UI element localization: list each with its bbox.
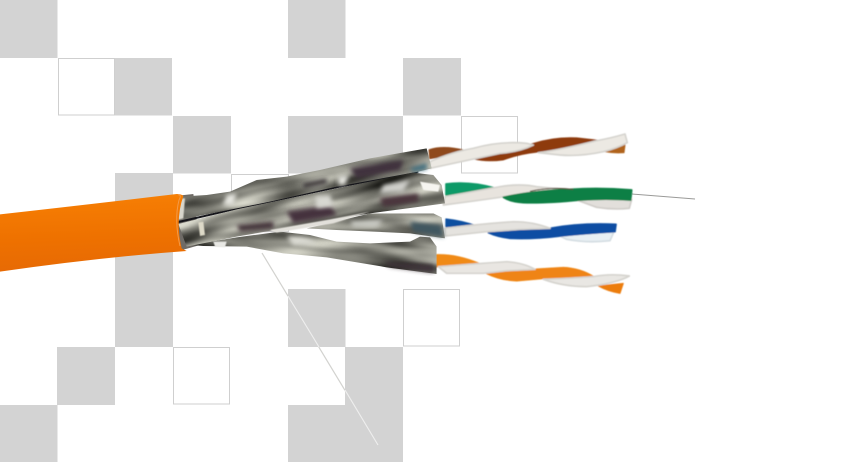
foil shield: top bundle	[183, 148, 432, 218]
wire pair: orange	[437, 255, 629, 293]
drain wire	[262, 253, 378, 445]
dark seam between top and middle bundles	[178, 172, 418, 222]
cable photo illustration	[0, 132, 695, 295]
foil base behind jacket	[175, 194, 200, 251]
twisted wire pairs	[429, 134, 632, 293]
wire pair: brown	[429, 134, 627, 168]
orange cable jacket	[0, 194, 187, 272]
background checker pattern	[0, 0, 518, 462]
foil shield: lower bundle	[193, 232, 437, 276]
foil shield: middle bundle	[178, 172, 445, 246]
wire pair: green	[443, 183, 632, 209]
shield ends inside jacket	[177, 198, 185, 220]
wire pair: blue	[445, 219, 616, 242]
green wire tip	[632, 194, 695, 199]
foil shield: third bundle	[307, 213, 446, 240]
foil shields	[0, 148, 446, 276]
